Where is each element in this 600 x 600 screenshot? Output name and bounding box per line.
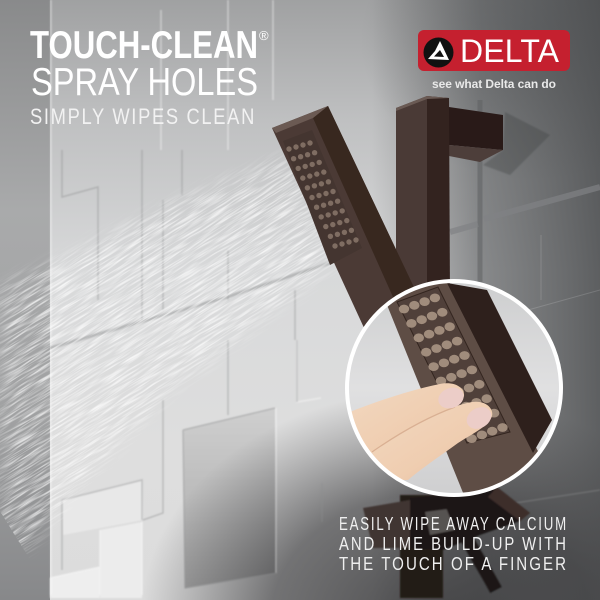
bottom caption: [339, 513, 568, 574]
tagline: see what Delta can do: [432, 77, 556, 91]
wordmark: DELTA: [460, 33, 560, 69]
Delta logo badge: [418, 30, 570, 71]
fingers: [350, 383, 495, 480]
hand shower head: [272, 106, 420, 330]
close-up nozzles: [399, 294, 508, 443]
lower fixture: slide bracket and hose: [363, 487, 530, 598]
subtitle: SIMPLY WIPES CLEAN: [30, 104, 256, 129]
title block: [30, 24, 269, 129]
nozzle panel: [397, 287, 510, 443]
shower head nozzles: [286, 140, 359, 249]
registered mark: ®: [259, 28, 269, 43]
title: Touch-Clean: TOUCH-CLEAN: [30, 24, 258, 67]
title: Spray Holes: SPRAY HOLES: [31, 61, 258, 104]
sliding bar and wall arm: [396, 96, 503, 300]
icon: Delta triangle mark: [424, 38, 454, 68]
water spray: [0, 158, 332, 554]
magnified circle callout: [347, 278, 561, 510]
